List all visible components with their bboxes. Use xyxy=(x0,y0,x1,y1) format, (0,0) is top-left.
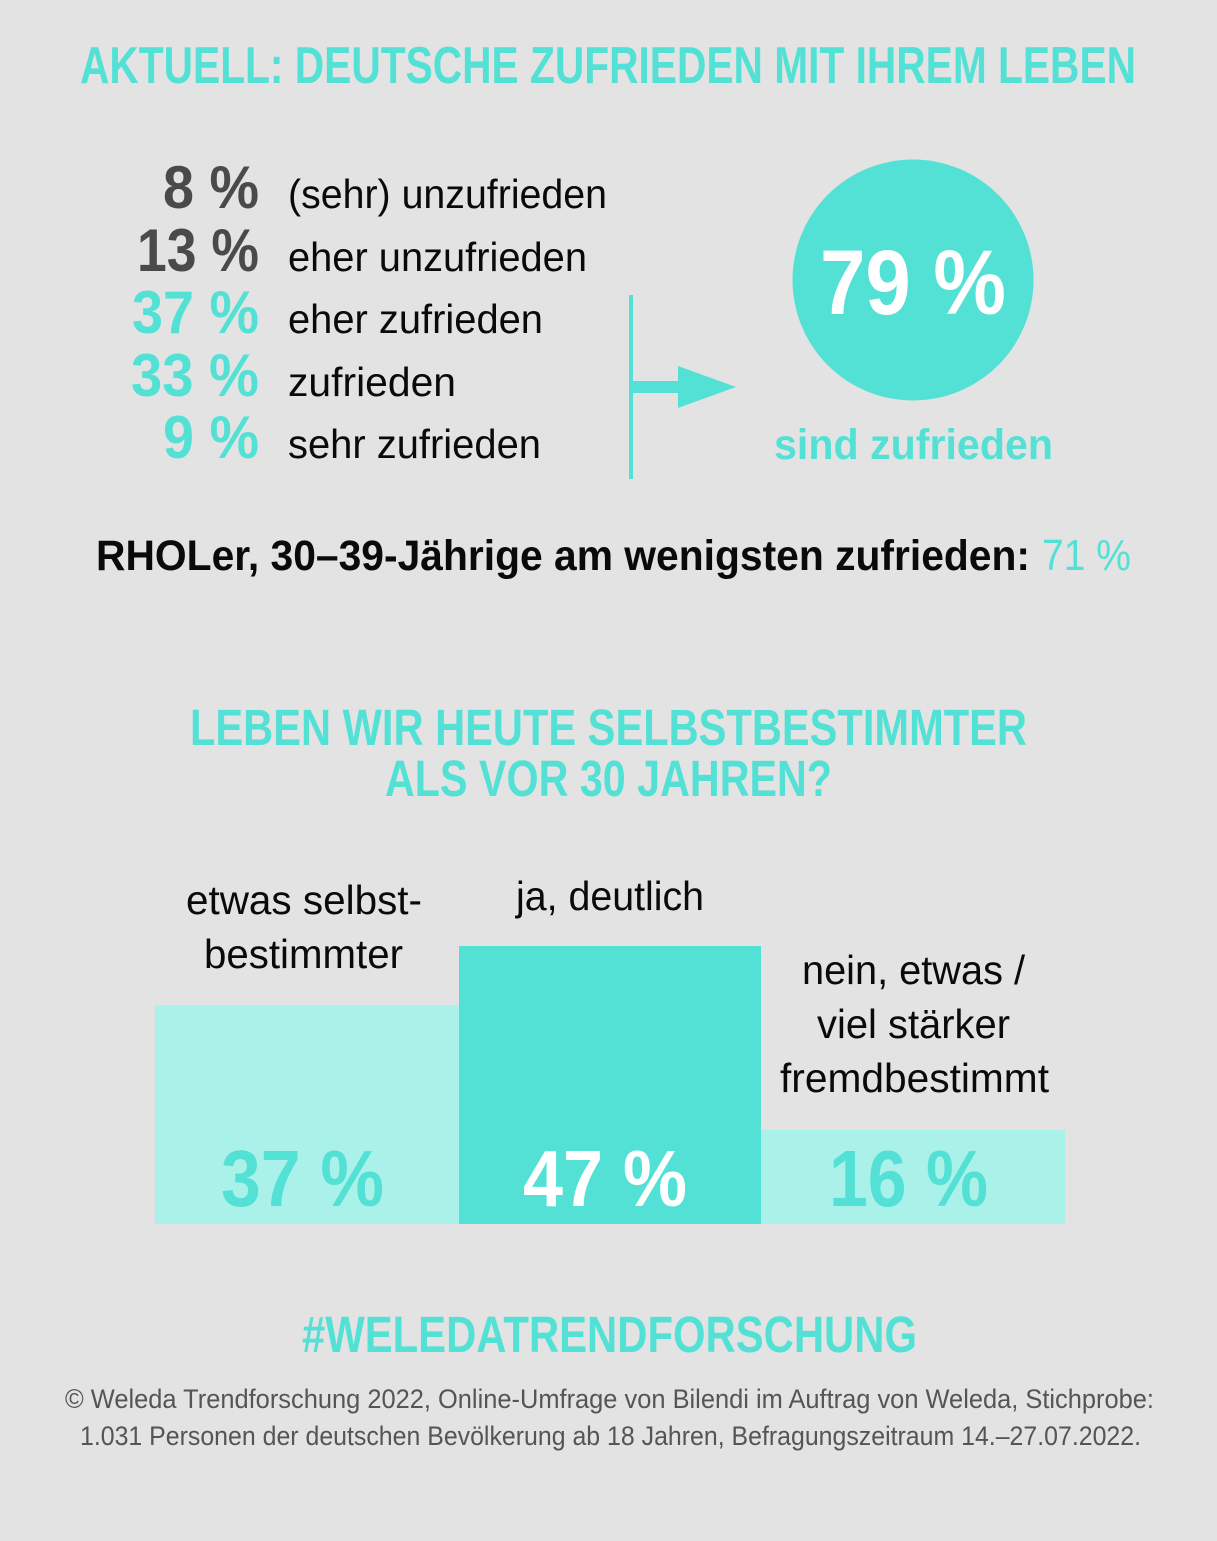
arrow: bracket to total xyxy=(629,295,736,479)
row: sehr zufrieden: 9 % xyxy=(163,404,259,471)
source note: © Weleda Trendforschung 2022, Online-Umfrage von Bilendi im Auftrag von Weleda, Stichprobe: xyxy=(65,1384,1154,1414)
label: etwas selbstbestimmter: bestimmter xyxy=(204,931,403,977)
bar: etwas selbstbestimmter xyxy=(155,1005,459,1224)
bar: fremdbestimmt: 16 % xyxy=(829,1134,988,1223)
label: etwas selbstbestimmter: etwas selbst- xyxy=(186,877,422,923)
row: sehr zufrieden xyxy=(163,404,541,471)
row: sehr unzufrieden xyxy=(163,154,607,221)
label: fremdbestimmt: nein, etwas / xyxy=(802,947,1026,993)
row: eher zufrieden xyxy=(132,279,543,346)
source note xyxy=(65,1384,1154,1451)
row: sehr zufrieden: sehr zufrieden xyxy=(288,421,541,467)
row: eher unzufrieden: eher unzufrieden xyxy=(288,234,587,280)
row: zufrieden xyxy=(131,342,456,409)
bar: ja, deutlich xyxy=(459,946,761,1224)
bar chart xyxy=(155,873,1065,1224)
row: eher unzufrieden xyxy=(137,217,587,284)
label: fremdbestimmt xyxy=(780,947,1050,1101)
hashtag: #WELEDATRENDFORSCHUNG xyxy=(302,1306,917,1363)
circle: 79 percent: 79 % xyxy=(820,232,1006,334)
row: eher zufrieden: 37 % xyxy=(132,279,259,346)
row: sehr unzufrieden: 8 % xyxy=(163,154,259,221)
row: sehr unzufrieden: (sehr) unzufrieden xyxy=(288,171,607,217)
bar: etwas selbstbestimmter: 37 % xyxy=(221,1134,384,1223)
callout: RHOLer: 71 % xyxy=(1042,531,1131,580)
heading: selbstbestimmter: ALS VOR 30 JAHREN? xyxy=(385,750,832,807)
row: eher zufrieden: eher zufrieden xyxy=(288,296,543,342)
row: zufrieden: 33 % xyxy=(131,342,259,409)
heading: selbstbestimmter xyxy=(190,699,1027,807)
circle: 79 percent xyxy=(792,160,1034,400)
caption: sind zufrieden: sind zufrieden xyxy=(774,421,1053,469)
label: fremdbestimmt: viel stärker xyxy=(817,1001,1010,1047)
label: fremdbestimmt: fremdbestimmt xyxy=(780,1055,1050,1101)
bar: fremdbestimmt xyxy=(761,1130,1065,1224)
bar: ja, deutlich: 47 % xyxy=(523,1134,687,1223)
row: zufrieden: zufrieden xyxy=(288,359,456,405)
source note: 1.031 Personen der deutschen Bevölkerung ab 18 Jahren, Befragungszeitraum 14.–27.07.2022. xyxy=(80,1421,1141,1451)
satisfaction list xyxy=(131,154,607,471)
heading: selbstbestimmter: LEBEN WIR HEUTE SELBSTBESTIMMTER xyxy=(190,699,1027,756)
row: eher unzufrieden: 13 % xyxy=(137,217,259,284)
label: ja, deutlich: ja, deutlich xyxy=(515,873,704,919)
callout: RHOLer: RHOLer, 30–39-Jährige am wenigsten zufrieden: xyxy=(96,532,1030,580)
label: etwas selbstbestimmter xyxy=(186,877,422,977)
